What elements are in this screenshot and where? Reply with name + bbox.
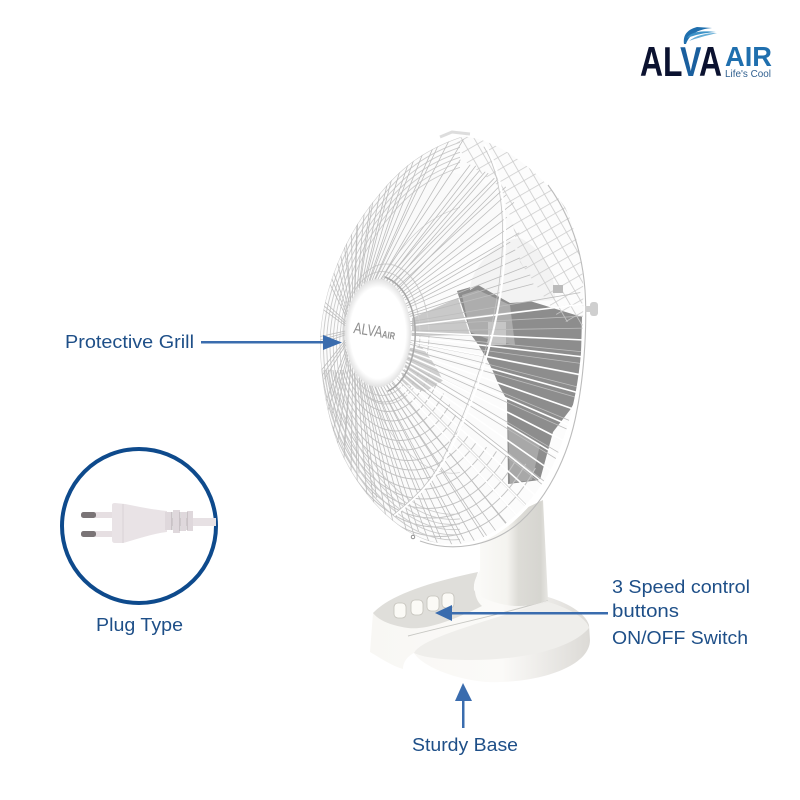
speed control buttons — [394, 593, 454, 618]
label: speed control: 3 Speed control — [612, 577, 750, 597]
front guard — [320, 139, 584, 544]
arrow: speed control — [435, 605, 608, 621]
fan base — [370, 572, 590, 682]
lower grid rings — [322, 370, 536, 537]
radial spokes white — [395, 304, 584, 517]
plug circle — [62, 449, 216, 603]
callout: protective grill — [65, 332, 342, 352]
label: speed control: buttons — [612, 601, 679, 621]
label: speed control: ON/OFF Switch — [612, 628, 748, 648]
callout: speed control buttons — [435, 577, 750, 648]
fan back and guard mesh — [320, 136, 584, 544]
label: sturdy base: Sturdy Base — [412, 735, 518, 755]
side hinge knob — [553, 285, 598, 316]
logo swoosh — [684, 27, 717, 44]
base top surface — [414, 602, 589, 660]
logo: Alva Air — [640, 27, 772, 85]
fan rim — [387, 135, 585, 546]
logo wordmark AIR: AIR — [725, 41, 772, 72]
back grid mesh upper right — [456, 136, 584, 326]
motor housing — [400, 285, 582, 484]
bottom screw — [411, 535, 415, 539]
radial spokes shadow — [320, 135, 584, 545]
logo wordmark ALVA: ALVA — [640, 38, 722, 85]
callout: sturdy base — [412, 683, 518, 755]
arrow: protective grill — [201, 335, 342, 350]
panel: plug type — [62, 449, 216, 635]
hub logo text: ALVAAIR — [352, 320, 397, 344]
fan stand neck — [474, 500, 548, 606]
base top plate — [373, 572, 482, 628]
fan photo illustration — [308, 123, 600, 682]
curved brace wires — [395, 145, 505, 515]
fan blades — [422, 238, 555, 386]
label: speed control — [612, 577, 750, 648]
icon: plug — [81, 503, 216, 543]
outer dome rings on the left — [320, 137, 460, 543]
arrow: sturdy base — [455, 683, 472, 728]
logo tagline: Life's Cool — [725, 68, 771, 80]
hub surround ring — [385, 277, 415, 391]
label: protective grill: Protective Grill — [65, 332, 194, 352]
fan hub — [345, 279, 411, 387]
label: plug type: Plug Type — [96, 615, 183, 635]
inner rings — [343, 264, 429, 404]
